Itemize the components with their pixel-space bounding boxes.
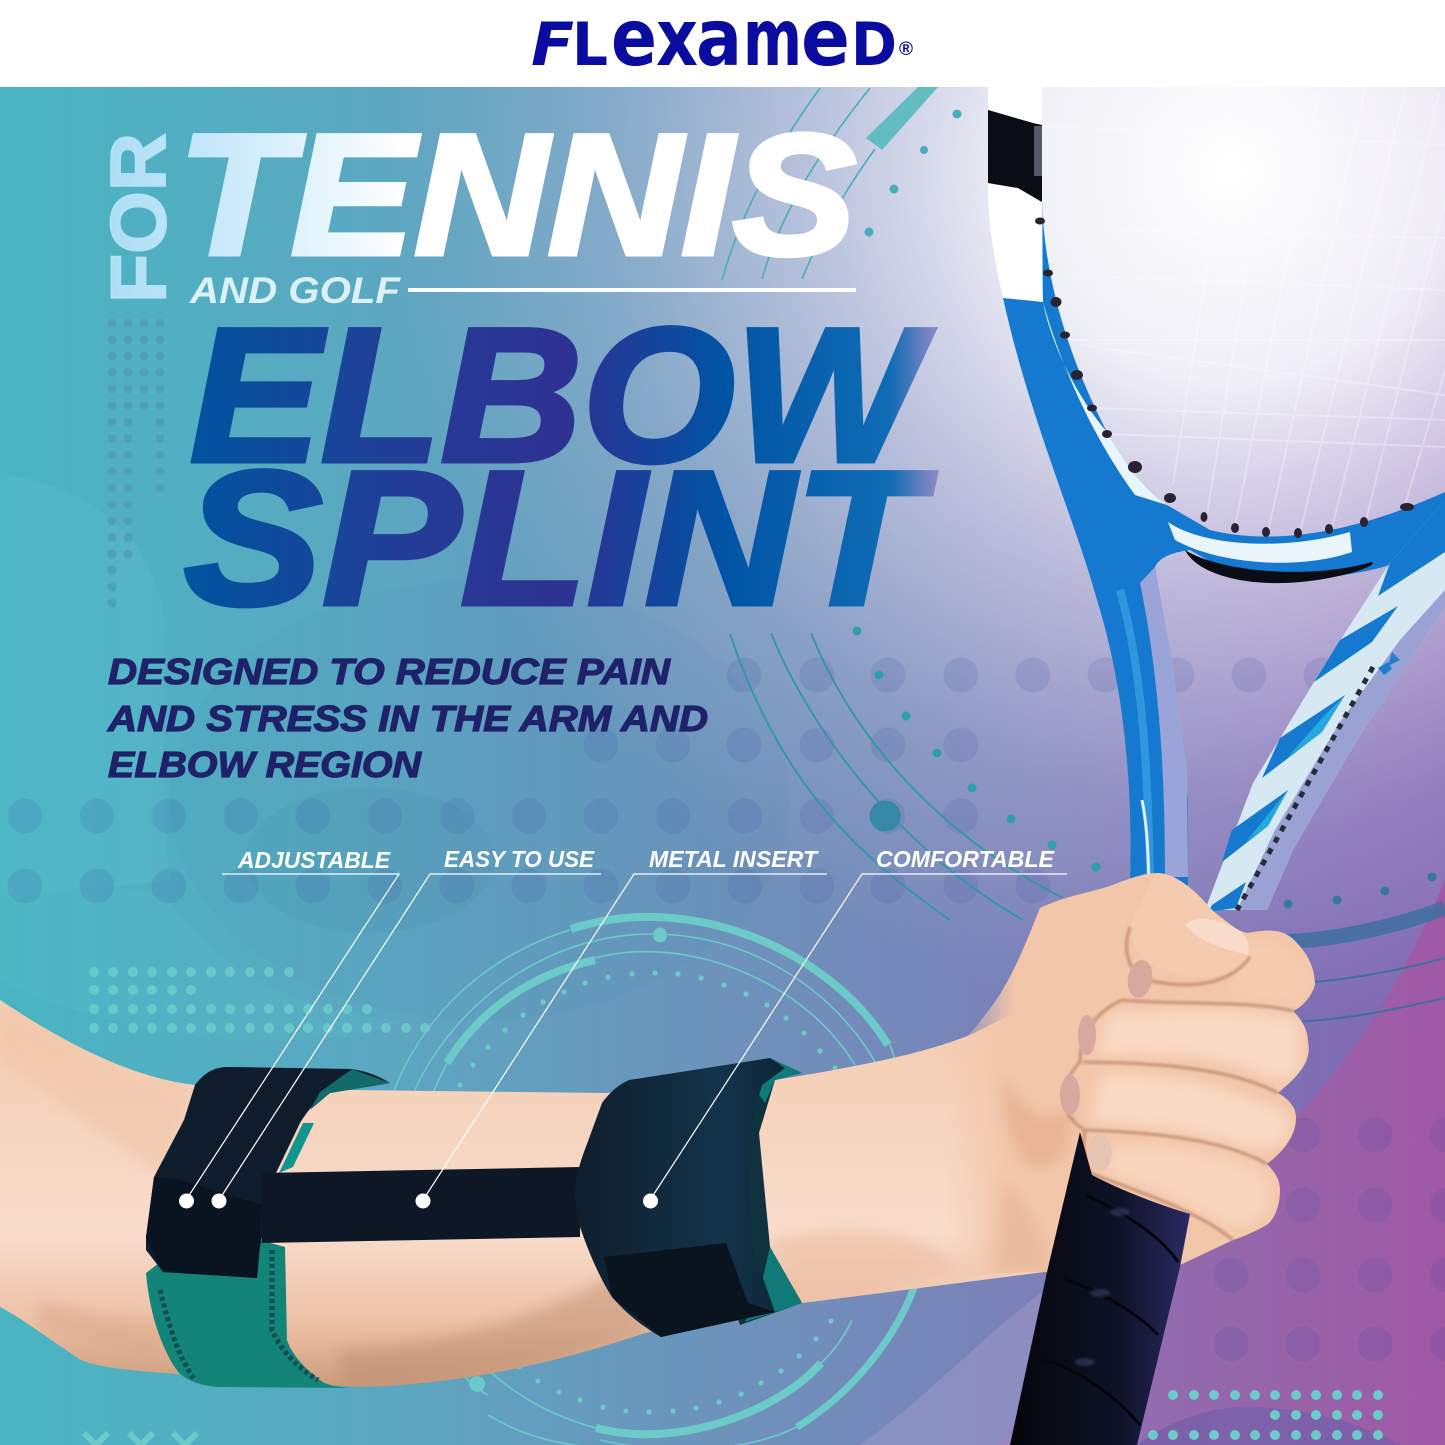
bridge white <box>1168 522 1352 563</box>
connecting strap <box>262 1167 580 1243</box>
decorative arcs mid right <box>730 633 1063 920</box>
frame inner white strip <box>1043 302 1167 505</box>
logo wordmark: D <box>851 10 897 80</box>
callout labels: EASY TO USE <box>444 846 595 872</box>
finger creases <box>1064 927 1293 1240</box>
frame white section <box>988 87 1043 302</box>
right throat shaft <box>1205 500 1445 910</box>
grip highlights <box>1075 1208 1130 1366</box>
racket <box>988 87 1445 912</box>
tagline <box>107 651 708 785</box>
logo wordmark <box>531 0 897 84</box>
right cuff <box>575 1058 785 1337</box>
chevrons bottom-left <box>84 1433 197 1445</box>
callout labels <box>237 846 1055 873</box>
grip wrap bands <box>1045 1195 1178 1425</box>
title ELBOW: ELBOW <box>190 289 934 502</box>
subtitle rule <box>408 288 856 292</box>
lower-right dot grid <box>1087 1390 1383 1440</box>
callout labels: METAL INSERT <box>649 846 819 872</box>
left dot matrix <box>108 319 164 607</box>
decorative dots mid right <box>852 626 1436 908</box>
logo bar <box>0 0 1445 87</box>
callout labels: ADJUSTABLE <box>237 847 391 873</box>
shaft dark dashes <box>1237 667 1373 910</box>
hand <box>945 873 1315 1282</box>
right cuff velcro <box>604 1243 775 1337</box>
lower-left dot grid <box>89 967 430 1033</box>
decorative wave lines right <box>1280 908 1445 1022</box>
logo wordmark: F <box>531 10 574 80</box>
decorative large dot grid <box>8 658 1445 1362</box>
frame black section <box>988 110 1042 202</box>
racket logo marks <box>1378 652 1400 675</box>
frame left side <box>988 87 1445 885</box>
tagline: AND STRESS IN THE ARM AND <box>107 698 708 739</box>
left cuff <box>146 1067 390 1278</box>
left cuff velcro <box>146 1177 262 1278</box>
grommets <box>1034 126 1414 538</box>
racket grip <box>1010 1132 1190 1445</box>
callout anchor dots <box>179 1194 658 1208</box>
left cuff teal rim <box>310 1069 390 1110</box>
decorative arcs behind title <box>722 87 938 280</box>
teal edge slivers <box>160 1120 314 1175</box>
HUD ring dots <box>455 928 838 1415</box>
shaft lavender reflection <box>1140 567 1188 877</box>
logo wordmark: L <box>572 10 608 80</box>
tagline: DESIGNED TO REDUCE PAIN <box>108 651 671 692</box>
shaft grey lower edge <box>1237 590 1445 910</box>
forearm <box>0 1000 1060 1387</box>
right cuff stitched rim <box>700 1058 802 1325</box>
callout labels: COMFORTABLE <box>876 846 1055 872</box>
title TENNIS: TENNIS <box>178 99 856 291</box>
circular HUD rings around the arm <box>382 917 915 1445</box>
finger lit areas <box>992 1007 1304 1272</box>
title SPLINT: SPLINT <box>184 432 937 645</box>
racket strings <box>1045 90 1445 533</box>
elbow brace <box>146 1058 802 1388</box>
shaft blue stripes <box>1208 500 1445 912</box>
subtitle AND GOLF: AND GOLF <box>189 270 402 311</box>
shaft cyan accents <box>1246 695 1345 842</box>
forearm shading <box>0 1000 960 1388</box>
title FOR: FOR <box>94 133 182 303</box>
thumb <box>1130 873 1251 977</box>
shaft highlight <box>1120 590 1150 880</box>
registered mark: ® <box>899 39 913 60</box>
decorative teal dots top <box>864 110 962 236</box>
rear strap stitching <box>160 1250 318 1380</box>
callout leader lines <box>186 874 1067 1200</box>
bridge shadow <box>1185 550 1373 583</box>
thumbnail <box>1186 919 1249 955</box>
right cuff teal ends <box>745 1058 802 1322</box>
fingernails <box>1060 958 1155 1171</box>
tagline: ELBOW REGION <box>108 744 422 785</box>
rear strap teal <box>146 1240 358 1388</box>
